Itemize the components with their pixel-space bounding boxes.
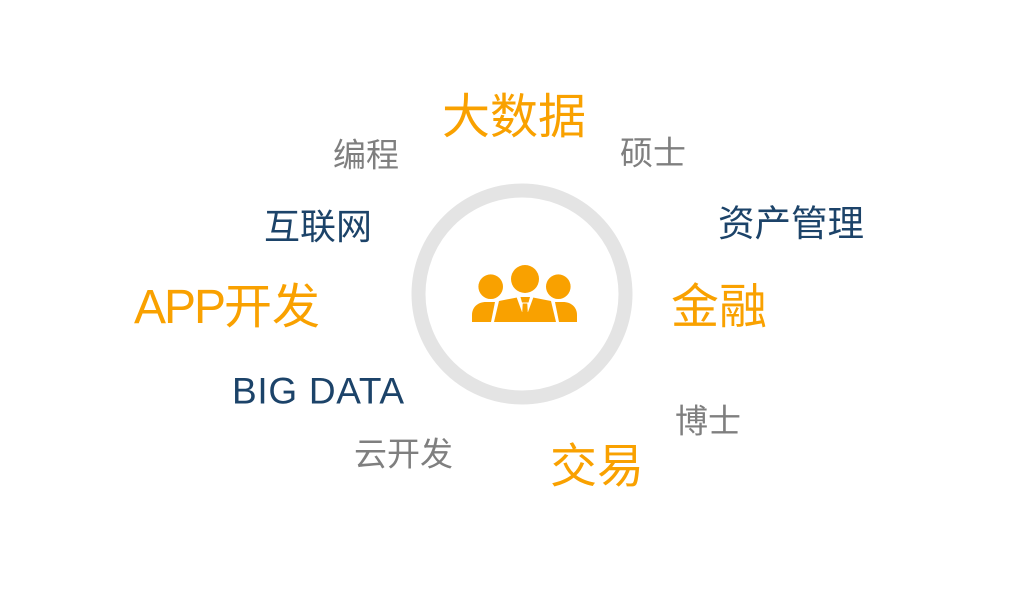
label: BIG DATA: BIG DATA <box>232 370 405 412</box>
icon: people <box>472 265 577 322</box>
label: 硕士: 硕士 <box>620 134 686 172</box>
label: 博士: 博士 <box>675 402 741 440</box>
label: 交易: 交易 <box>550 440 644 492</box>
label: 互联网: 互联网 <box>264 206 372 247</box>
label: APP开发: APP开发 <box>134 281 320 334</box>
label: 金融: 金融 <box>671 281 767 334</box>
ring <box>418 190 626 398</box>
label: 资产管理: 资产管理 <box>718 203 864 244</box>
label: 大数据: 大数据 <box>442 91 586 144</box>
label: 云开发: 云开发 <box>354 436 453 472</box>
label: 编程: 编程 <box>333 136 399 174</box>
